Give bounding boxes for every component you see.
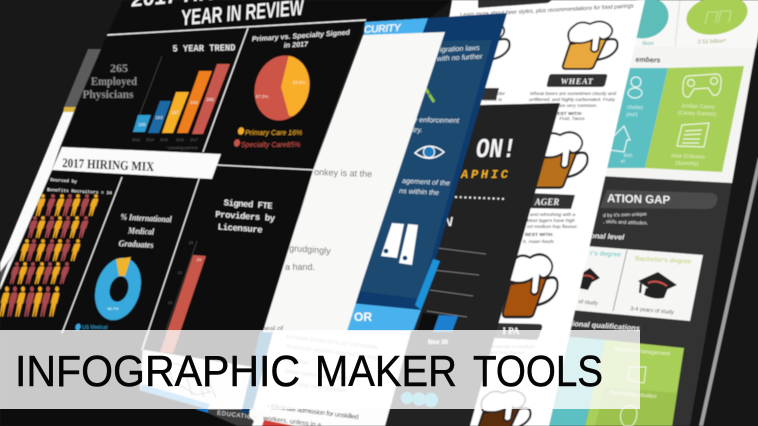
legend: us medical graduates (75, 323, 108, 331)
heading: primary vs specialty: in 2017 (283, 39, 309, 50)
tablet edge highlight (699, 158, 758, 426)
text: lager description (523, 212, 578, 245)
bullet text (278, 334, 382, 395)
text: hidden style description: flavour is (482, 97, 503, 103)
heading: signed FTE providers: Licensure (217, 222, 263, 236)
strip: education: EDUCATION (217, 411, 257, 421)
icon: wheat beer mug (563, 22, 618, 69)
panel: lower front page (140, 332, 295, 426)
text: wheat description: unfiltered, and highly carbonated. Fruity (529, 97, 616, 103)
panel: 2017 year in review dark page (0, 0, 452, 426)
icon: hidden mug (455, 22, 510, 69)
card: degrees (550, 244, 703, 321)
strip: blue (195, 409, 209, 413)
left yellow sliver (63, 107, 76, 112)
title (129, 0, 306, 30)
heading: signed FTE providers: Signed FTE (223, 198, 274, 212)
text: management: ns within the (399, 186, 439, 197)
panel: lower white bullet page (248, 331, 411, 426)
text: lager description: h, Asian foods (523, 239, 554, 245)
heading: signed FTE providers: Providers by (215, 210, 276, 224)
dotted separator (455, 197, 506, 199)
stat: 265 employed physicians (82, 61, 137, 101)
icon: person outline (628, 77, 642, 98)
heading pill: education gap (600, 190, 717, 209)
text: Jordan Casey (678, 103, 717, 118)
label: 3-4 years of study: 3-4 years of study (630, 306, 674, 316)
text: security enforcement: ity enforcement (410, 115, 460, 125)
icon: hearts (401, 392, 438, 407)
label: Bachelor's degree: Bachelor's degree (635, 256, 692, 265)
text: management (399, 176, 450, 197)
bar chart: licensure (160, 240, 206, 353)
panel: white text page (260, 32, 445, 333)
text: IPA description: and hop flavour (490, 350, 524, 356)
bar chart: 5 year trend: 2015 (160, 138, 168, 142)
panel: green qualifications (585, 340, 684, 426)
text: sourced by (47, 177, 112, 196)
heading: members: embers (635, 57, 661, 64)
text: security enforcement (405, 115, 460, 134)
heading strip (478, 0, 552, 8)
bar chart: licensure: 15 (168, 300, 173, 305)
bullet text: American workers against low-wage (286, 344, 382, 362)
subtitle: Learn more about beer styles, plus recommendations for food pairings (460, 3, 634, 19)
icon: lager mug (533, 132, 588, 188)
label: IPA (490, 323, 542, 340)
left white sliver (0, 112, 74, 290)
icon: small graduation cap (575, 268, 600, 290)
text: management: agement of the (402, 176, 450, 188)
text: peal: peal of (262, 326, 283, 333)
label: IPA: I PA (502, 326, 520, 336)
legend: us medical graduates: US Medical (82, 325, 108, 331)
text: Nick D'Aloisio: (Summly) (675, 161, 699, 167)
heading: SECURITY: CURITY (364, 22, 402, 36)
text: IPA description (485, 344, 535, 356)
icon: house (610, 126, 630, 152)
text: intro (603, 211, 648, 227)
heading: ON!: ON! (476, 136, 516, 166)
label: LAGER (522, 193, 575, 209)
stat: 265 employed physicians: Physicians (82, 87, 134, 101)
panel: tablet with community infographic (540, 0, 758, 426)
icon: people (705, 11, 731, 24)
strip: red (262, 420, 295, 426)
panel: darker study row (595, 387, 677, 426)
label: LAGER: AGER (534, 197, 559, 207)
text: sourced by: Benefits Recruiters = 34 (47, 187, 112, 196)
bar chart: 5 year trend: 187 (171, 110, 179, 115)
heading band: 2017 hiring mix: 2017 HIRING MIX (62, 155, 155, 174)
lower blue band (340, 303, 421, 331)
icon: eye (415, 146, 444, 158)
left gray sliver (64, 49, 101, 107)
timeline rows (427, 248, 486, 317)
icon: green handcuff (424, 86, 434, 102)
label: WHEAT (547, 74, 607, 87)
text: grudgingly: grudgingly (289, 243, 331, 256)
text: monkey: onkey is at the (314, 167, 372, 179)
heading: N: N (443, 214, 453, 229)
divider lines (62, 20, 366, 350)
bar chart: 5 year trend: 2013 (132, 138, 140, 142)
icon: green blob (683, 0, 751, 40)
bullet text: Make lawful immigration (285, 369, 349, 383)
icon: head (620, 405, 637, 426)
pie chart: primary vs specialty: 33.0% (293, 80, 305, 85)
text: psychology studies: Psychology studies (609, 390, 657, 400)
heading: signed FTE providers (215, 198, 276, 236)
icon: briefcase (628, 367, 646, 383)
accent stripe (415, 259, 440, 310)
pie chart: primary vs specialty (254, 54, 311, 122)
text: immigration laws (437, 43, 483, 63)
icon: binders (381, 223, 418, 265)
tablet page (600, 0, 758, 183)
icon: newspaper (677, 123, 709, 147)
panel: ON! dark page (380, 103, 560, 426)
heading strip (363, 18, 428, 40)
panel: blue immigration page (340, 13, 507, 331)
heading: educational level: onal level (590, 231, 625, 242)
stat: billion label: llion (642, 41, 654, 47)
heading: ATION GAP: ATION GAP (607, 193, 671, 207)
pictogram: recruiters (0, 194, 98, 317)
text: intro: d by it's own unique (603, 211, 647, 219)
title: infographic maker tools: INFOGRAPHIC (15, 347, 300, 396)
heading band: 2017 hiring mix (52, 147, 221, 179)
text: wheat description (529, 91, 616, 122)
bar chart: licensure: 24 (197, 257, 202, 262)
bar chart: 5 year trend: 163 (155, 115, 163, 120)
text: teal member names: jour) (625, 112, 638, 118)
text: teal member names: cholas (627, 105, 643, 111)
heading: international medical graduates: Medical (127, 225, 155, 237)
left gray shadow (0, 250, 17, 285)
legend: primary care: Primary Care 16% (245, 130, 302, 137)
bullet text: system and naturalization. (278, 380, 348, 395)
text: Nick D'Aloisio (671, 153, 705, 167)
tablet bezel (670, 0, 758, 426)
label: hidden style (474, 88, 499, 100)
panel: teal members (606, 68, 668, 168)
text: lager description: BEST WITH: (525, 232, 554, 238)
stat: 265 employed physicians: Employed (91, 74, 137, 88)
bar chart: 5 year trend: * excluding part-time (166, 146, 198, 150)
text: wheat description: flavors are very common. (543, 103, 597, 109)
bar chart: 5 year trend: 106 (138, 122, 146, 127)
panel: green members (645, 66, 744, 172)
panel: education gap dark section (540, 176, 732, 426)
donut chart: international graduates: 90.7% (107, 306, 119, 311)
bullet text: competition (278, 357, 309, 367)
heading: international medical graduates: % International (120, 212, 172, 224)
heading: primary vs specialty: Primary vs. Specialty Signed (251, 28, 351, 43)
heading: international medical graduates (118, 212, 172, 250)
bar chart: 5 year trend: 2014 (146, 138, 154, 142)
label: degree: r's degree (590, 250, 621, 259)
panel: beer styles page (380, 0, 645, 426)
text: Jordan Casey: Jordan Casey (681, 103, 715, 111)
icon: graduation cap (638, 272, 677, 299)
bar chart: licensure: 20 (178, 270, 183, 275)
legend: specialty care (233, 138, 301, 149)
bar chart: 5 year trend: 2017 (190, 138, 198, 142)
bar chart: 5 year trend (132, 56, 230, 150)
bar: dark (417, 313, 438, 332)
text: teal member names (621, 105, 643, 165)
text: lager description: nd medium hop flavour. (527, 224, 578, 230)
label: of study: of study (578, 299, 598, 307)
bar chart: 5 year trend: 2016 (176, 138, 184, 142)
donut chart: international graduates (88, 252, 148, 326)
heading: additional qualifications: ional qualifications (572, 319, 640, 333)
left blue strip (242, 332, 273, 409)
text: lager description: and refreshing with a (530, 212, 576, 218)
heading: international medical graduates: Graduates (118, 238, 154, 250)
label: WHEAT: WHEAT (561, 76, 594, 86)
heading: 5 year trend: 5 YEAR TREND (172, 42, 236, 55)
stat: 2.52 billion: 2.52 billion* (698, 38, 727, 45)
stat: 265 employed physicians: 265 (110, 61, 128, 75)
text: immigration laws: with no further (437, 52, 483, 63)
title: infographic maker tools (15, 347, 603, 396)
text: sourced by: Sourced by (50, 177, 77, 185)
icon: game controller (683, 74, 721, 97)
text: wheat description: BEST WITH: (554, 111, 583, 117)
text: business management: Business management (614, 347, 671, 357)
text: intro: , skills and attitudes. (603, 219, 648, 227)
legend: specialty care: Specialty Care85% (241, 142, 301, 149)
inner panel (350, 40, 492, 299)
text: Nick D'Aloisio: Nick D'Aloisio (671, 153, 705, 161)
translucent title band (0, 330, 640, 409)
text: immigration laws: igration laws (440, 43, 480, 54)
heading: APHIC: APHIC (460, 168, 509, 182)
text: lager description: Most lagers have high (527, 218, 575, 224)
illustration (168, 364, 216, 398)
text: hidden style description (476, 91, 505, 103)
icon: IPA mug (503, 254, 558, 317)
bar chart: licensure: 25 (189, 240, 194, 245)
text: IPA description: is moderate to medium (485, 344, 535, 350)
title: infographic maker tools: TOOLS (473, 347, 603, 396)
text: eliminate admission: • Eliminate admission for unskilled (267, 403, 359, 421)
text: wheat description: Fruit, Tacos (559, 116, 585, 122)
panel: teal qualifications (545, 336, 605, 426)
bullet text: Increase protections on Vulnerable (286, 334, 379, 351)
bar chart: 5 year trend: 242 (190, 100, 198, 105)
text: security enforcement: untry. (405, 125, 423, 134)
bar: blue (433, 315, 458, 332)
label: OR: OR (354, 310, 372, 324)
text: wheat description: Wheat beers are sometimes cloudy and (530, 91, 616, 97)
title: infographic maker tools: MAKER (315, 347, 457, 396)
text: teal member names: e! (621, 159, 626, 165)
light blue strip (140, 384, 210, 409)
bar chart: 5 year trend: 265 (206, 97, 214, 102)
label: Nov 30: Nov 30 (428, 340, 448, 346)
top stat cards (600, 0, 758, 48)
pie chart: primary vs specialty: 67.0% (256, 94, 268, 99)
icon: stout mug (476, 390, 531, 426)
icon: teal blob (616, 0, 674, 45)
legend: primary care (237, 126, 302, 137)
text: hidden style description: beers in color (476, 91, 505, 97)
strip: education (208, 409, 257, 426)
strip: navy (240, 409, 250, 414)
text: Jordan Casey: (Casey Games) (678, 110, 717, 118)
text: teal member names: tion (624, 153, 632, 159)
text: a hand: a hand. (285, 262, 315, 272)
